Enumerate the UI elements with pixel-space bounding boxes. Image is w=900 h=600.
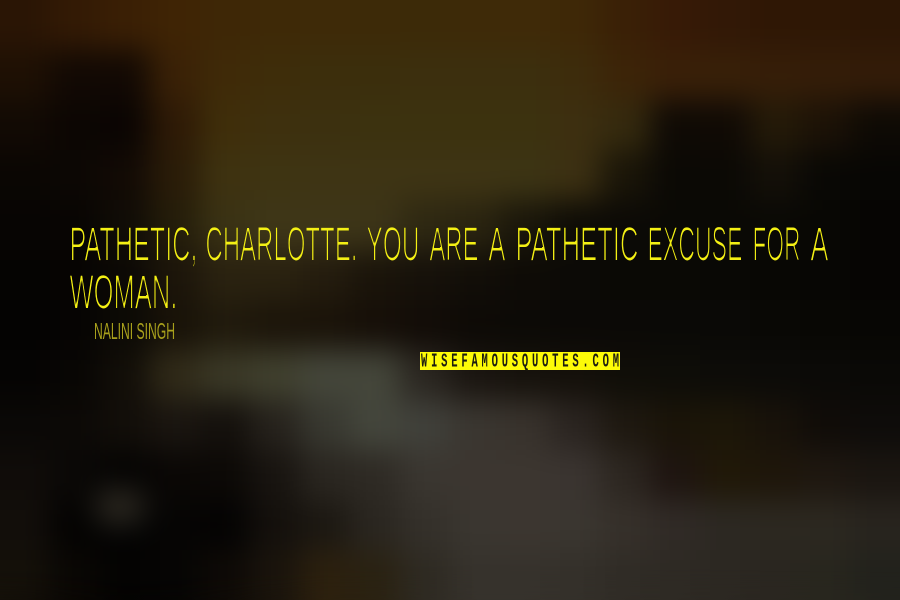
author name: NALINI SINGH — [94, 318, 175, 344]
quote word: A (end of line): A — [810, 218, 828, 271]
quote word: WOMAN.: WOMAN. — [69, 266, 177, 319]
quote word: A: A — [488, 218, 505, 271]
quote text — [69, 218, 828, 319]
quote text: ARE — [429, 218, 478, 271]
quote text: FOR — [752, 218, 800, 271]
quote word: PATHETIC: PATHETIC — [515, 218, 638, 271]
quote text: EXCUSE — [647, 218, 742, 271]
quote text: CHARLOTTE. — [205, 218, 357, 271]
badge text: WISEFAMOUSQUOTES.COM — [421, 350, 619, 373]
badge background — [420, 352, 620, 370]
quote word: YOU: YOU — [366, 218, 419, 271]
quote word: PATHETIC,: PATHETIC, — [69, 218, 197, 271]
badge: wisefamousquotes.com — [420, 350, 620, 373]
